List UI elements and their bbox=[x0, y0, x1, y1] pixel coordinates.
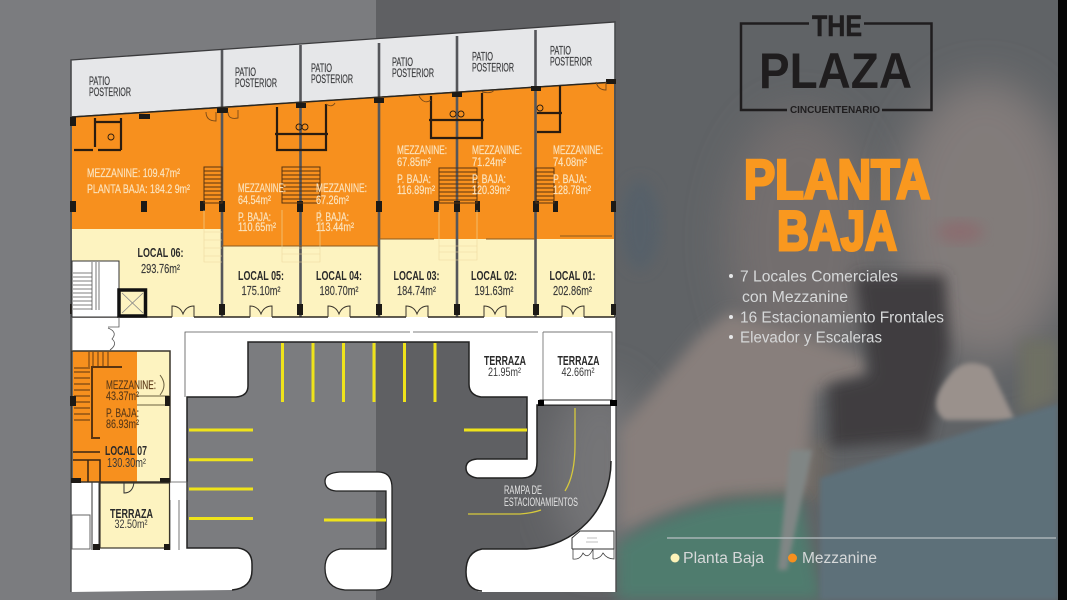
patio labels: POSTERIOR bbox=[311, 74, 353, 86]
mezzanine and ground floor area labels: 67.85m² bbox=[397, 155, 431, 169]
unit dividing walls bbox=[222, 30, 536, 317]
legend divider bbox=[667, 537, 1056, 539]
local names and totals: LOCAL 02: bbox=[471, 269, 517, 283]
mezzanine and ground floor area labels: 110.65m² bbox=[238, 220, 276, 234]
terraza labels bbox=[110, 354, 600, 531]
storefront double doors bbox=[172, 306, 584, 317]
mezzanine and ground floor area labels: P. BAJA: bbox=[238, 210, 271, 224]
orange mezzanine areas bbox=[72, 82, 614, 246]
local 07 labels bbox=[105, 378, 156, 470]
mezzanine and ground floor area labels: MEZZANINE: 109.47m² bbox=[87, 166, 180, 180]
ramp entry beam bbox=[538, 400, 617, 406]
mezzanine and ground floor area labels: 64.54m² bbox=[238, 193, 271, 207]
mezzanine and ground floor area labels: 120.39m² bbox=[472, 183, 510, 197]
feature bullet list: con Mezzanine bbox=[742, 289, 848, 306]
faint stair continuation bbox=[204, 210, 477, 262]
patio labels: PATIO bbox=[392, 57, 413, 69]
local names and totals: LOCAL 05: bbox=[238, 269, 284, 283]
mezzanine and ground floor area labels: 74.08m² bbox=[553, 155, 587, 169]
mezzanine and ground floor area labels: P. BAJA: bbox=[397, 172, 431, 186]
terraza right box bbox=[543, 332, 612, 401]
local names and totals: LOCAL 06: bbox=[138, 246, 184, 260]
patio labels: POSTERIOR bbox=[235, 78, 277, 90]
feature bullet list bbox=[729, 268, 944, 346]
elevator bbox=[119, 290, 146, 316]
local names and totals: 202.86m² bbox=[553, 284, 592, 298]
patio labels: PATIO bbox=[235, 67, 256, 79]
mezzanine and ground floor area labels: MEZZANINE: bbox=[553, 143, 603, 157]
ramp label bbox=[504, 485, 578, 509]
logo: The Plaza Cincuentenario: CINCUENTENARIO bbox=[790, 105, 880, 116]
local names and totals: LOCAL 03: bbox=[394, 269, 440, 283]
patio labels: POSTERIOR bbox=[472, 62, 514, 74]
feature bullet list: 7 Locales Comerciales bbox=[740, 268, 898, 286]
terraza labels: TERRAZA bbox=[484, 354, 526, 368]
terraza 32.50 bbox=[72, 482, 170, 550]
central parking island bbox=[325, 472, 392, 590]
patio labels: POSTERIOR bbox=[89, 87, 131, 99]
white exterior and terraces bbox=[71, 317, 616, 592]
structural columns bbox=[70, 79, 616, 315]
terraza labels: 32.50m² bbox=[114, 517, 148, 531]
mezzanine and ground floor area labels: MEZZANINE: bbox=[238, 181, 286, 195]
local 07 labels: 130.30m² bbox=[107, 456, 146, 470]
mezzanine and ground floor area labels: 113.44m² bbox=[316, 220, 354, 234]
legend: Mezzanine bbox=[802, 550, 877, 567]
plan outer right and left edges bbox=[71, 22, 616, 592]
staircases bbox=[204, 167, 554, 203]
local names and totals: LOCAL 01: bbox=[550, 269, 596, 283]
mezzanine and ground floor area labels: P. BAJA: bbox=[316, 210, 349, 224]
mezzanine and ground floor area labels: P. BAJA: bbox=[553, 172, 587, 186]
cream ground floor areas bbox=[72, 229, 614, 317]
local names and totals: 175.10m² bbox=[242, 284, 280, 298]
terraza labels: TERRAZA bbox=[558, 354, 600, 368]
mezzanine and ground floor area labels: 116.89m² bbox=[397, 183, 435, 197]
blurred background photo of two women shopping bbox=[376, 0, 1067, 600]
local names and totals: LOCAL 04: bbox=[316, 269, 362, 283]
patio labels: PATIO bbox=[311, 63, 332, 75]
legend: Planta Baja bbox=[683, 550, 764, 567]
back doors bbox=[206, 82, 606, 121]
patio band bbox=[71, 22, 615, 117]
local 07 labels: 86.93m² bbox=[106, 417, 139, 431]
mezzanine and ground floor area labels: MEZZANINE: bbox=[316, 181, 367, 195]
storefront and back walls bbox=[72, 82, 615, 317]
local 07 labels: P. BAJA: bbox=[106, 406, 139, 420]
local names and totals: 191.63m² bbox=[474, 284, 514, 298]
restrooms bbox=[74, 86, 562, 150]
mezzanine and ground floor area labels: MEZZANINE: bbox=[397, 143, 447, 157]
local names and totals bbox=[138, 246, 596, 298]
local 07 labels: MEZZANINE: bbox=[106, 378, 156, 392]
local names and totals: 184.74m² bbox=[397, 284, 436, 298]
patio labels: POSTERIOR bbox=[392, 68, 434, 80]
local names and totals: 180.70m² bbox=[320, 284, 358, 298]
patio labels: PATIO bbox=[89, 76, 110, 88]
patio labels bbox=[89, 46, 592, 99]
terraza labels: 21.95m² bbox=[488, 365, 521, 379]
title: Planta Baja: PLANTA bbox=[744, 148, 930, 210]
feature bullet list: 16 Estacionamiento Frontales bbox=[740, 310, 944, 326]
mezzanine and ground floor area labels: PLANTA BAJA: 184.2 9m² bbox=[87, 182, 190, 196]
legend bbox=[670, 550, 877, 567]
local 07 unit bbox=[70, 351, 170, 483]
terraza labels: TERRAZA bbox=[110, 507, 153, 521]
asphalt edge outline bbox=[187, 342, 611, 591]
floor plan bbox=[70, 22, 617, 592]
parking stripes bbox=[189, 343, 527, 520]
ramp label: ESTACIONAMIENTOS bbox=[504, 497, 578, 509]
mezzanine and ground floor area labels: MEZZANINE: bbox=[472, 143, 522, 157]
equipment room bbox=[572, 531, 614, 559]
title: Planta Baja bbox=[744, 148, 930, 262]
ramp direction lines bbox=[468, 408, 575, 514]
patio labels: POSTERIOR bbox=[550, 56, 592, 68]
patio labels: PATIO bbox=[472, 52, 493, 64]
logo: The Plaza Cincuentenario: THE bbox=[812, 10, 862, 43]
logo: The Plaza Cincuentenario: PLAZA bbox=[759, 43, 912, 99]
title: Planta Baja: BAJA bbox=[777, 199, 897, 262]
black right edge strip bbox=[1058, 0, 1067, 600]
feature bullet list: Elevador y Escaleras bbox=[740, 330, 882, 346]
mezzanine and ground floor area labels: 67.26m² bbox=[316, 193, 349, 207]
mezzanine edge lines bbox=[222, 236, 612, 246]
mezzanine and ground floor area labels: 71.24m² bbox=[472, 155, 506, 169]
local 07 labels: 43.37m² bbox=[106, 389, 139, 403]
local 07 labels: LOCAL 07 bbox=[105, 444, 147, 458]
terraza labels: 42.66m² bbox=[562, 365, 594, 379]
local names and totals: 293.76m² bbox=[141, 262, 180, 276]
stairs and elevator core bbox=[72, 261, 146, 317]
left gray background panel bbox=[0, 0, 376, 600]
access corridor lines bbox=[72, 317, 538, 550]
mezzanine and ground floor area labels bbox=[87, 143, 603, 234]
mezzanine and ground floor area labels: 128.78m² bbox=[553, 183, 591, 197]
ramp label: RAMPA DE bbox=[504, 485, 542, 497]
mezzanine and ground floor area labels: P. BAJA: bbox=[472, 172, 506, 186]
logo: The Plaza Cincuentenario bbox=[741, 10, 932, 116]
patio labels: PATIO bbox=[550, 46, 571, 58]
